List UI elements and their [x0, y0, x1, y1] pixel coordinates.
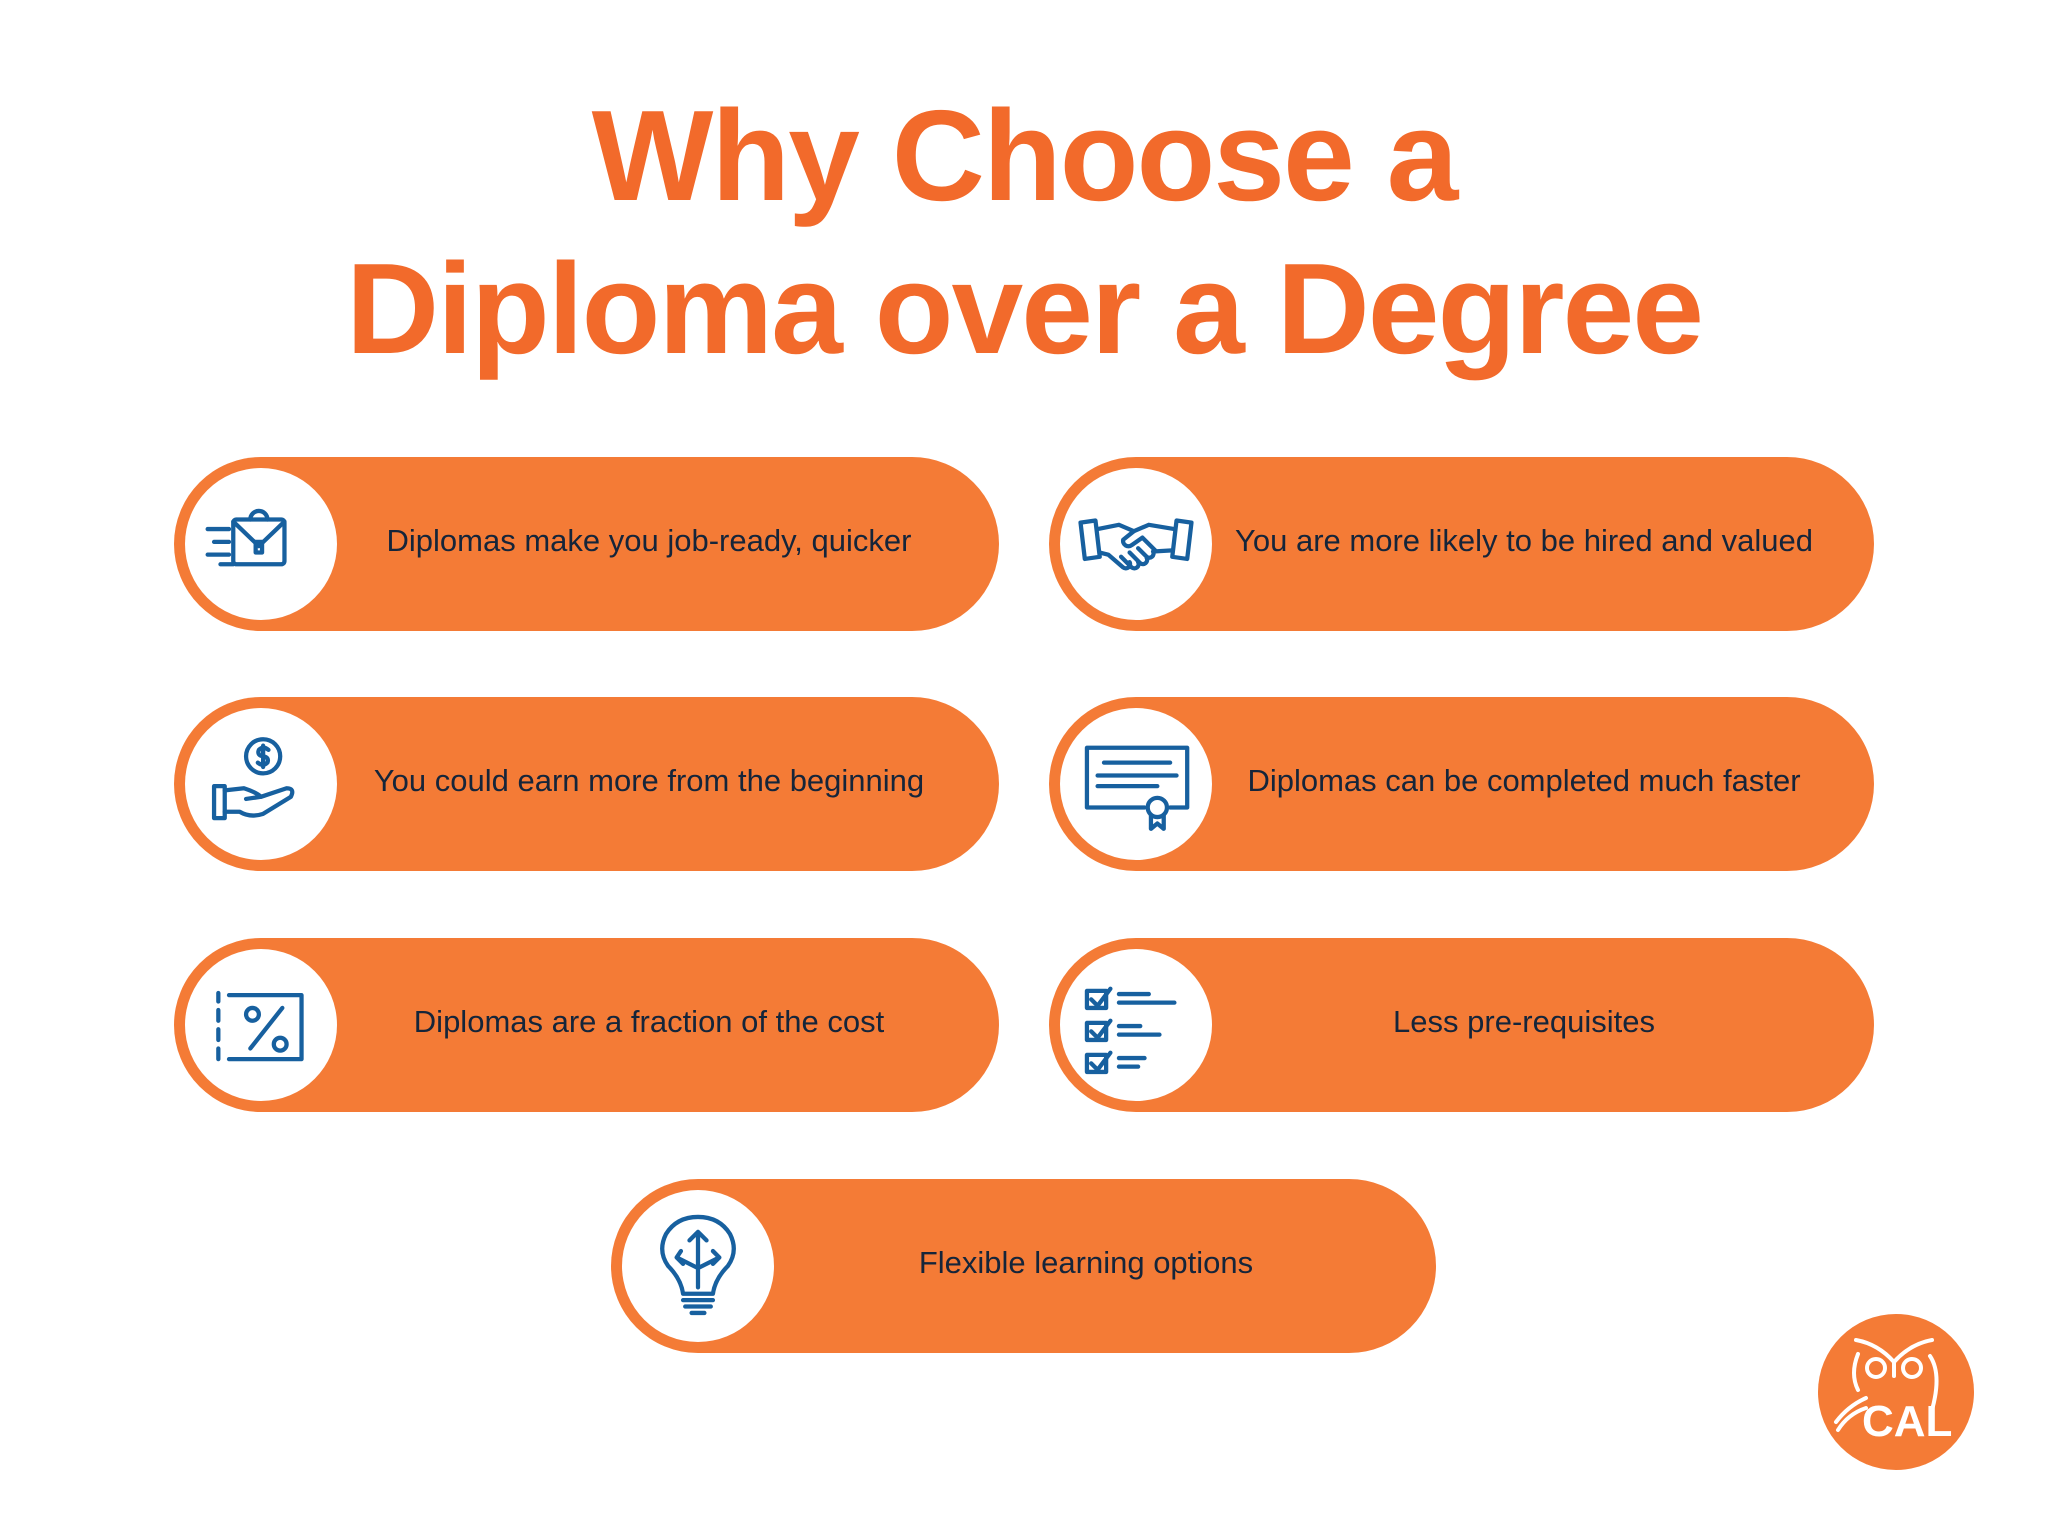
icon: lightbulb: [622, 1190, 774, 1342]
title: Why Choose a: [592, 84, 1456, 228]
text: Flexible learning options: [919, 1245, 1253, 1280]
pill: fraction of cost: [174, 938, 999, 1112]
pill: hired: [1049, 457, 1874, 631]
logo: CAL owl: CAL: [1862, 1397, 1952, 1446]
pill: job-ready: [174, 457, 999, 631]
pill: less pre-requisites: [1049, 938, 1874, 1112]
text: Diplomas can be completed much faster: [1247, 763, 1801, 798]
title: [346, 84, 1702, 381]
title: Diploma over a Degree: [346, 237, 1702, 381]
icon: briefcase: [185, 468, 337, 620]
text: Diplomas make you job-ready, quicker: [387, 523, 911, 558]
pill: completed faster: [1049, 697, 1874, 871]
pill: earn more: [174, 697, 999, 871]
pill: flexible learning: [611, 1179, 1436, 1353]
icon: checklist: [1060, 949, 1212, 1101]
text: You are more likely to be hired and valued: [1235, 523, 1813, 558]
icon: certificate: [1060, 708, 1212, 860]
icon: percent tag: [185, 949, 337, 1101]
text: Diplomas are a fraction of the cost: [414, 1004, 884, 1039]
text: You could earn more from the beginning: [374, 763, 924, 798]
icon: handshake: [1060, 468, 1212, 620]
text: Less pre-requisites: [1393, 1004, 1655, 1039]
logo: CAL owl: [1818, 1314, 1974, 1470]
icon: hand with coin: [185, 708, 337, 860]
